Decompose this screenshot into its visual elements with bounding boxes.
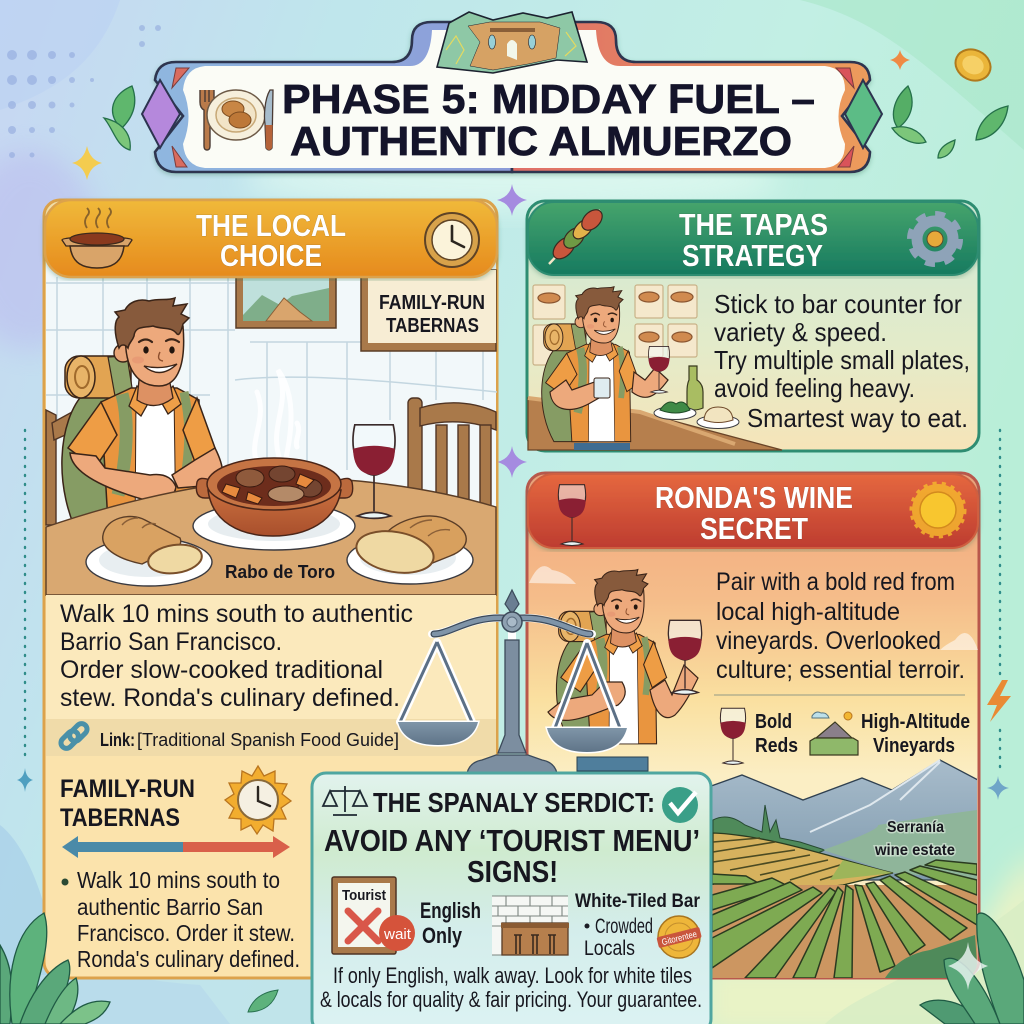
label: english only bbox=[420, 898, 481, 948]
verdict heading: THE SPANALY SERDICT: bbox=[373, 787, 655, 818]
text block: Smartest way to eat. bbox=[747, 403, 968, 433]
chair left bbox=[46, 410, 72, 525]
section: link strip: Link: bbox=[100, 730, 135, 750]
sparkle bbox=[948, 942, 988, 990]
legend: bold reds: Bold bbox=[755, 711, 792, 733]
header: ronda's wine secret bbox=[528, 474, 978, 548]
section: family-run tabernas: Ronda's culinary defined. bbox=[77, 946, 300, 972]
scale halo bbox=[400, 618, 620, 745]
text block: Stick to bar counter for bbox=[714, 289, 962, 319]
icon: guarantee seal bbox=[656, 916, 702, 958]
label: rabo de toro: Rabo de Toro bbox=[225, 562, 335, 582]
wall picture bbox=[236, 270, 336, 328]
warning headline: SIGNS! bbox=[467, 854, 558, 889]
icon: tourist sign: Tourist bbox=[342, 887, 386, 904]
icon: gear bbox=[910, 214, 960, 264]
banner frame bbox=[155, 22, 870, 172]
label: english only: Only bbox=[422, 923, 463, 948]
label: english only: English bbox=[420, 898, 481, 923]
icon: skewer bbox=[549, 206, 606, 264]
section: family-run tabernas: FAMILY-RUN bbox=[60, 775, 195, 803]
far field bbox=[712, 832, 894, 885]
section: family-run tabernas: authentic Barrio San bbox=[77, 894, 263, 920]
wine glass bbox=[648, 346, 670, 393]
header: the tapas strategy: STRATEGY bbox=[682, 238, 823, 273]
icon: sun bbox=[912, 484, 964, 536]
right green hill bbox=[823, 810, 977, 880]
wine glass bbox=[668, 620, 702, 694]
vine rows bbox=[712, 860, 977, 978]
plants: bottom left bbox=[0, 913, 110, 1024]
right hedge bbox=[885, 935, 978, 978]
icon: right gem bbox=[845, 80, 882, 148]
label: serrania wine estate: Serranía bbox=[887, 819, 944, 836]
title text bbox=[282, 76, 815, 164]
left pan bbox=[398, 722, 478, 745]
header: the local choice: CHOICE bbox=[220, 238, 322, 273]
panel: the spanaly verdict bbox=[312, 773, 711, 1024]
mountains bbox=[700, 760, 978, 880]
panel: the local choice bbox=[44, 200, 497, 978]
panel: the tapas strategy bbox=[527, 201, 979, 451]
icon: check badge bbox=[662, 787, 698, 823]
section: family-run tabernas: Francisco. Order it stew. bbox=[77, 920, 295, 946]
icon: soup bowl bbox=[62, 208, 132, 268]
counter bbox=[528, 398, 782, 450]
table bbox=[46, 478, 496, 595]
header: the local choice bbox=[45, 200, 497, 277]
label: family-run tabernas sign: TABERNAS bbox=[386, 315, 479, 337]
title text: PHASE 5: MIDDAY FUEL – bbox=[282, 76, 815, 122]
header: the local choice: THE LOCAL bbox=[196, 208, 346, 243]
section: walk text: stew. Ronda's culinary defined. bbox=[60, 684, 400, 712]
section: walk text: Order slow-cooked traditional bbox=[60, 656, 383, 684]
vineyard landscape bbox=[700, 760, 978, 978]
decorative halftone dots bbox=[7, 25, 161, 158]
section: family-run tabernas: Walk 10 mins south to bbox=[77, 867, 280, 893]
chair right bbox=[408, 398, 496, 518]
traveler bbox=[542, 287, 668, 450]
scale chains bbox=[400, 642, 620, 728]
scale beam bbox=[434, 618, 590, 634]
label: serrania wine estate: wine estate bbox=[874, 842, 955, 859]
icon: sun clock bbox=[225, 766, 291, 834]
verdict body text: If only English, walk away. Look for white tiles bbox=[333, 963, 692, 988]
text block: avoid feeling heavy. bbox=[714, 373, 915, 403]
section: link strip bbox=[46, 719, 496, 756]
leaf: small bbox=[248, 990, 278, 1012]
scale base bbox=[467, 755, 557, 773]
icon: guarantee seal: Gitorentee bbox=[661, 929, 698, 947]
legend: high-altitude vineyards bbox=[810, 711, 970, 757]
verdict body text: & locals for quality & fair pricing. Your guarantee. bbox=[320, 987, 702, 1012]
icon: chain link bbox=[59, 721, 89, 751]
header: ronda's wine secret: RONDA'S WINE bbox=[655, 480, 853, 515]
bread plate right bbox=[347, 516, 473, 584]
traveler bbox=[62, 298, 222, 540]
scene: family taberna table bbox=[46, 262, 497, 595]
legend: high-altitude vineyards: Vineyards bbox=[873, 735, 955, 757]
clouds bbox=[529, 566, 978, 650]
tile lines bbox=[46, 277, 497, 480]
text block: variety & speed. bbox=[714, 317, 887, 347]
panel base bbox=[44, 200, 497, 978]
stew casserole bbox=[193, 458, 355, 550]
legend: bold reds bbox=[720, 708, 798, 764]
legend: high-altitude vineyards: High-Altitude bbox=[861, 711, 970, 733]
text block: local high-altitude bbox=[716, 598, 900, 626]
label: white-tiled bar: Locals bbox=[584, 937, 635, 960]
wine glass bbox=[353, 425, 395, 518]
panel: ronda's wine secret bbox=[527, 473, 979, 978]
section: link strip: [Traditional Spanish Food Guide] bbox=[137, 730, 399, 750]
section: walk text bbox=[46, 595, 496, 720]
section: walk text: Barrio San Francisco. bbox=[60, 628, 282, 656]
decorative dotted lines bbox=[25, 430, 1000, 770]
icon: left gem bbox=[142, 80, 180, 148]
warning headline bbox=[324, 823, 700, 889]
arrow: two-way bbox=[62, 836, 290, 858]
icon: fork, plate and knife bbox=[200, 90, 273, 150]
plate of bread bbox=[697, 407, 739, 428]
section: family-run tabernas: TABERNAS bbox=[60, 804, 180, 832]
label: serrania wine estate bbox=[874, 819, 955, 859]
title text: AUTHENTIC ALMUERZO bbox=[290, 118, 792, 164]
dirt bbox=[700, 885, 978, 978]
text block bbox=[714, 568, 965, 695]
traveler with wine bbox=[548, 570, 698, 771]
legend: bold reds: Reds bbox=[755, 735, 798, 757]
icon: white-tiled bar bbox=[492, 896, 569, 955]
header: ronda's wine secret: SECRET bbox=[700, 511, 808, 546]
icon: wine glass bbox=[558, 485, 586, 546]
wine bottle bbox=[687, 366, 703, 410]
section: family-run tabernas bbox=[60, 766, 300, 972]
trees and hedge bbox=[712, 804, 825, 852]
right pan bbox=[547, 728, 627, 752]
icon: clock bbox=[425, 213, 479, 267]
section: walk text: Walk 10 mins south to authentic bbox=[60, 600, 413, 628]
header: the tapas strategy bbox=[528, 202, 978, 275]
plants: bottom right bbox=[920, 913, 1024, 1024]
icon: gold coin bbox=[950, 44, 996, 86]
warning headline: AVOID ANY ‘TOURIST MENU’ bbox=[324, 823, 700, 858]
text block bbox=[714, 289, 970, 433]
bread plate left bbox=[86, 516, 212, 586]
menu cards bbox=[533, 285, 697, 365]
label: white-tiled bar bbox=[575, 891, 701, 960]
label: family-run tabernas sign: FAMILY-RUN bbox=[379, 292, 485, 314]
plate of greens bbox=[654, 402, 696, 420]
icon: tourist sign bbox=[332, 877, 415, 954]
verdict body text bbox=[320, 963, 702, 1012]
icon: Ronda bridge map bbox=[437, 12, 587, 73]
header: the tapas strategy: THE TAPAS bbox=[679, 207, 828, 242]
title banner bbox=[142, 12, 882, 172]
scale pole bbox=[498, 640, 526, 753]
leaves bbox=[104, 86, 1008, 158]
steam bbox=[255, 370, 299, 463]
text block: Try multiple small plates, bbox=[714, 345, 970, 375]
text block: culture; essential terroir. bbox=[716, 656, 965, 684]
sparkles and accents bbox=[17, 50, 1011, 800]
text block: Pair with a bold red from bbox=[716, 568, 955, 596]
scene: tapas bar bbox=[528, 285, 782, 450]
label: white-tiled bar: Crowded bbox=[595, 915, 653, 938]
icon: scales bbox=[323, 786, 367, 815]
label: family-run tabernas sign bbox=[361, 270, 496, 351]
label: white-tiled bar: White-Tiled Bar bbox=[575, 891, 701, 912]
icon: balance scale bbox=[398, 590, 627, 773]
text block: vineyards. Overlooked bbox=[716, 627, 941, 655]
icon: tourist sign: wait bbox=[383, 926, 412, 943]
